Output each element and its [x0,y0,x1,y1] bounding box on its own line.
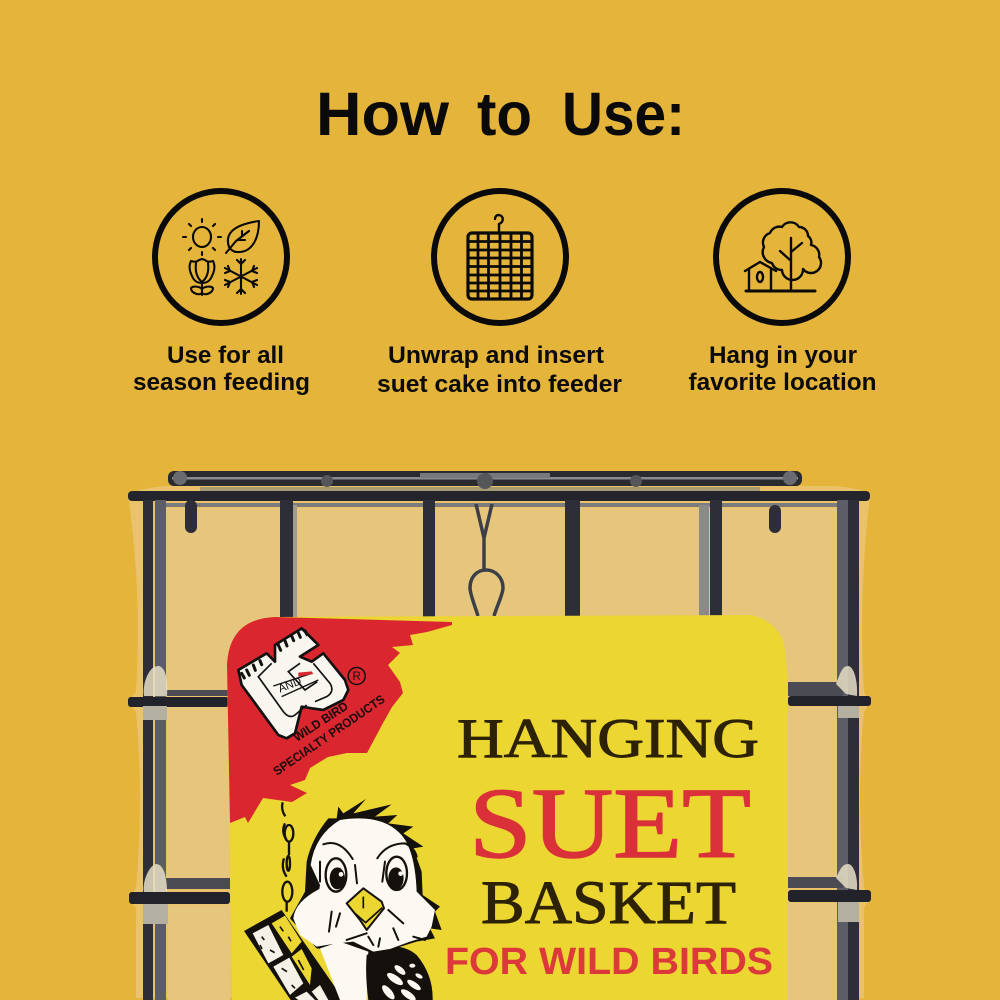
horizontal wires [128,682,871,904]
CS logo: AND [277,675,303,695]
chain [282,802,293,912]
bird and suet basket illustration [244,799,442,1000]
title [316,80,685,148]
logo tagline: WILD BIRD [291,699,351,745]
title: How [316,80,450,148]
breast spots [380,963,423,1000]
top rail [128,471,870,507]
step 1: all season feeding [133,191,310,396]
registered mark: R [353,671,361,683]
basket panes [163,508,838,1000]
icon: suet feeder [434,191,566,323]
left eye [326,858,346,892]
caption: Hang in your [709,342,857,369]
wire suet basket [128,471,871,1000]
step 2: unwrap and insert [377,191,622,398]
caption: Use for all [167,342,284,369]
CS logo [238,628,348,738]
wrap highlights [143,666,859,924]
plastic wrap [128,486,870,998]
icon: tree and birdhouse [716,191,848,323]
title: Use: [562,80,685,148]
label heading: BASKET: BASKET [481,870,736,937]
mini suet basket [244,910,344,1000]
step 3: hang in location [688,191,876,396]
vertical wires [143,500,859,1000]
registered mark [348,668,365,684]
hanging hook [470,504,503,616]
logo tagline: SPECIALTY PRODUCTS [271,692,387,778]
caption: season feeding [133,369,310,396]
beak [347,888,384,930]
caption: suet cake into feeder [377,371,622,398]
bird head silhouette [290,799,442,955]
caption: favorite location [688,369,876,396]
label subheading: FOR WILD BIRDS [445,941,773,983]
red corner [227,617,452,823]
brows and feather marks [320,843,425,947]
right eye [386,857,407,890]
product label [227,615,788,1000]
white belly [320,942,368,1000]
caption: Unwrap and insert [388,342,604,369]
yellow label [227,615,788,1000]
dark breast [366,947,433,1000]
title: to [477,80,532,148]
label heading: SUET: SUET [469,767,751,879]
icon: seasons [155,191,287,323]
label heading: HANGING: HANGING [457,708,759,770]
white face [293,818,435,952]
